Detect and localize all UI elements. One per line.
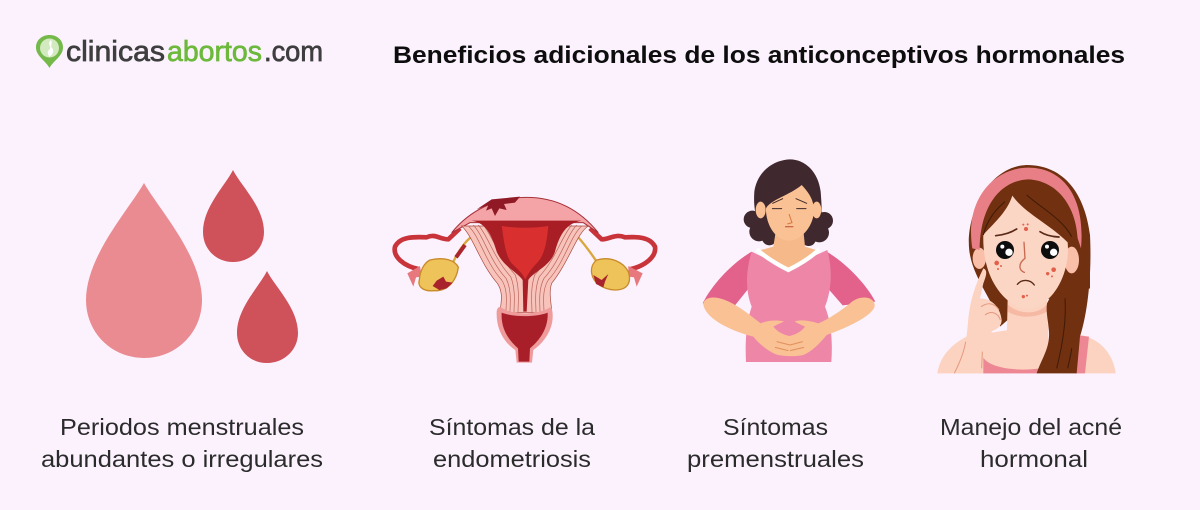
endometrial spot xyxy=(477,197,520,216)
face xyxy=(983,196,1068,309)
arms and hands xyxy=(703,297,875,356)
fundus xyxy=(452,197,598,233)
neck xyxy=(758,230,818,268)
headband xyxy=(971,168,1082,250)
label: periodos xyxy=(41,414,323,472)
label: premenstruales: Síntomas xyxy=(723,414,828,440)
label: premenstruales: premenstruales xyxy=(687,446,864,472)
icon: woman with premenstrual symptoms xyxy=(703,159,875,362)
hair xyxy=(744,159,833,246)
logo: clinicasabortos.com: clinicas xyxy=(66,36,165,68)
logo: clinicasabortos.com: .com xyxy=(264,36,323,68)
label: acné xyxy=(940,414,1122,472)
eyebrows, nose, mouth xyxy=(996,229,1059,285)
uterine cavity xyxy=(472,221,582,312)
acne spots xyxy=(994,223,1056,298)
collar xyxy=(757,249,819,270)
icon: uterus with endometriosis xyxy=(395,197,655,363)
facial features xyxy=(772,199,807,209)
hand xyxy=(955,268,1002,373)
icon: green map pin xyxy=(36,35,63,68)
label: acné: Manejo del acné xyxy=(940,414,1122,440)
sleeves xyxy=(703,252,752,305)
label: periodos: abundantes o irregulares xyxy=(41,446,323,472)
ears xyxy=(973,248,986,269)
fallopian tubes xyxy=(395,228,460,269)
label: acné: hormonal xyxy=(980,446,1088,472)
logo: clinicasabortos.com: abortos xyxy=(167,36,262,68)
ovary ligaments xyxy=(453,237,471,262)
neck xyxy=(1007,298,1048,345)
front hair strand xyxy=(1037,235,1090,373)
shoulders and top xyxy=(937,325,1048,373)
muscle wall xyxy=(462,226,588,313)
title: Beneficios adicionales de los anticonceptivos hormonales xyxy=(393,42,1125,69)
ovaries xyxy=(419,259,458,291)
cervix and vagina xyxy=(497,307,553,363)
hair strokes xyxy=(983,195,1072,237)
icon: girl with acne xyxy=(937,165,1116,373)
label: premenstruales xyxy=(687,414,864,472)
label: endometriosis: endometriosis xyxy=(433,446,591,472)
icon: blood drops xyxy=(86,170,298,363)
dress xyxy=(746,250,832,362)
label: endometriosis: Síntomas de la xyxy=(429,414,595,440)
label: periodos: Periodos menstruales xyxy=(60,414,304,440)
back hair xyxy=(969,165,1090,327)
logo: clinicasabortos.com xyxy=(36,35,323,68)
eyes xyxy=(996,241,1014,259)
face xyxy=(766,185,814,241)
label: endometriosis xyxy=(429,414,595,472)
